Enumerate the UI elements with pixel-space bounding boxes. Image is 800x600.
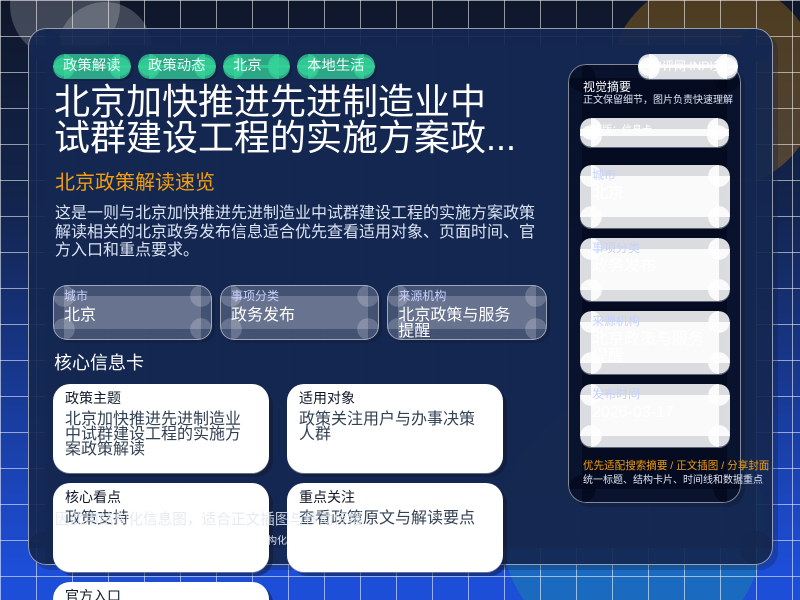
subtitle: 北京政策解读速览 (55, 172, 215, 194)
info card: 重点关注 (287, 483, 503, 572)
description: 这是一则与北京加快推进先进制造业中试群建设工程的实施方案政策 (55, 205, 535, 222)
tag: 北京: 北京 (233, 58, 262, 74)
card title: 重点关注 (299, 489, 355, 505)
label: 事项分类 (592, 241, 640, 255)
value: 北京政策与服务提醒 (592, 331, 704, 365)
label: 事项分类 (231, 289, 279, 303)
info card: 核心看点 (53, 483, 269, 572)
summary card: 发布时间 (580, 384, 730, 447)
template label: 模版：信息卡 (592, 125, 652, 136)
card body: 政策支持 (65, 510, 129, 527)
tag: 北京 (223, 54, 290, 79)
value: 2026-03-17 (592, 404, 674, 421)
card title: 政策主题 (65, 390, 121, 406)
label: 城市 (64, 289, 88, 303)
card title: 核心看点 (65, 489, 121, 505)
card body: 政策关注用户与办事决策人群 (299, 411, 475, 443)
footer small note: 信息经结构化整理 (227, 536, 307, 547)
tag: 政策动态: 政策动态 (148, 58, 206, 74)
label: 发布时间 (592, 387, 640, 401)
info card: 官方入口 (53, 582, 269, 600)
tag: 政策动态 (138, 54, 216, 79)
info card: 政策主题 (53, 384, 269, 473)
description: 方入口和重点要求。 (55, 242, 199, 259)
sidebar subheading: 正文保留细节，图片负责快速理解 (583, 95, 733, 106)
summary card: 来源机构 (580, 311, 730, 374)
title (54, 81, 516, 158)
summary card: 城市 (580, 165, 730, 228)
title: 试群建设工程的实施方案政... (54, 117, 516, 158)
meta card: 城市 (53, 285, 212, 340)
sidebar heading: 视觉摘要 (583, 80, 631, 94)
template row (580, 118, 729, 147)
decorative circle: top left large (10, 0, 120, 60)
decorative circle: top right amber (608, 0, 800, 190)
footer note: 因此用结构化信息图，适合正文插图与移动传播 (55, 512, 363, 528)
meta card: 来源机构 (387, 285, 547, 340)
label: 来源机构 (592, 314, 640, 328)
card body: 北京加快推进先进制造业中试群建设工程的实施方案政策解读 (65, 411, 241, 458)
decorative circle: top left small (58, 2, 152, 96)
tag: 政策解读 (53, 54, 131, 79)
label: 城市 (592, 168, 616, 182)
title: 北京加快推进先进制造业中 (54, 81, 486, 122)
source badge: 中评网 INPI务 (650, 59, 725, 73)
summary card: 事项分类 (580, 238, 730, 301)
card title: 适用对象 (299, 390, 355, 406)
style note: 统一标题、结构卡片、时间线和数据重点 (583, 475, 763, 486)
value: 政务发布 (231, 307, 295, 324)
description (55, 204, 535, 259)
section heading: 核心信息卡 (54, 353, 144, 373)
value: 北京政策与服务提醒 (398, 307, 510, 340)
tag: 本地生活 (297, 54, 375, 79)
value: 北京 (64, 307, 96, 324)
meta card: 事项分类 (220, 285, 379, 340)
description: 解读相关的北京政务发布信息适合优先查看适用对象、页面时间、官 (55, 224, 535, 240)
label: 来源机构 (398, 289, 446, 303)
source badge (638, 54, 738, 79)
tag: 本地生活: 本地生活 (307, 58, 365, 74)
info card: 适用对象 (287, 384, 503, 473)
tag: 政策解读: 政策解读 (63, 58, 121, 74)
usage note: 优先适配搜索摘要 / 正文插图 / 分享封面 (583, 460, 769, 472)
value: 北京 (592, 185, 624, 202)
decorative circle: bottom right teal (501, 394, 765, 600)
panel: visual summary sidebar (568, 64, 741, 503)
value: 政务发布 (592, 258, 656, 275)
card body: 查看政策原文与解读要点 (299, 510, 475, 527)
